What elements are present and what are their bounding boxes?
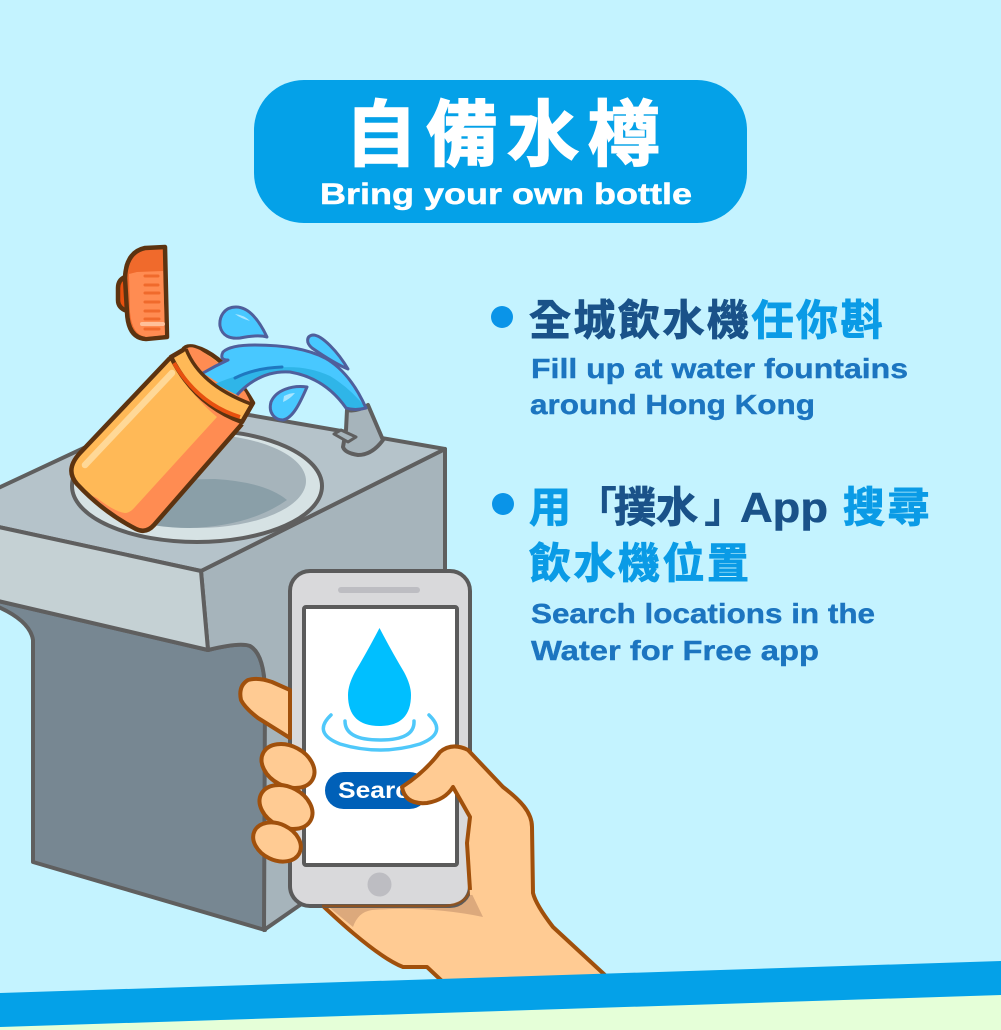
faucet [334,405,383,455]
palm lower outline [322,905,443,982]
index finger [240,679,290,738]
home button [368,872,392,896]
description 1: around Hong Kong [530,389,815,420]
fountain front face [0,526,208,650]
heading 2: 搜尋 [843,484,932,531]
icon: hand palm [322,750,610,982]
bottle highlight [85,373,172,465]
icon: fingers [240,679,322,869]
bottle opening [186,347,251,404]
basin rim [72,430,322,542]
bottle neck band [174,363,240,417]
heading 1: 全城飲水機 [529,297,752,344]
icon: orange bottle with water [71,345,366,531]
fountain top surface [0,403,445,571]
finger 2 [254,735,322,797]
description 1 [530,353,908,420]
fountain pedestal [0,600,265,930]
palm shadow [330,890,483,927]
description 1: Fill up at water fountains [531,353,908,384]
water drop logo [348,628,411,726]
description 2: Water for Free app [531,635,819,666]
basin water shade [88,479,287,528]
icon: thumb [402,745,606,976]
heading 2: 「 [575,484,617,531]
phone bottom shadow line [322,888,470,906]
heading 2: App [740,484,828,531]
title banner: 自備水樽 [345,96,669,176]
phone speaker [338,587,420,593]
bullet point 1 [491,297,908,420]
search button: Search [338,777,426,803]
finger 3 [252,776,320,838]
phone body [290,571,470,906]
bottle neck [171,346,253,422]
icon: water droplets [220,307,348,420]
illustration: water fountain [0,403,445,930]
title banner: Bring your own bottle [320,178,692,211]
heading 2: 撲水 [614,484,698,531]
basin interior [88,434,306,528]
heading 2: 飲水機位置 [529,540,752,587]
phone screen [304,607,457,865]
bottle light side [71,358,217,513]
title banner [254,80,747,223]
finger 4 [247,815,307,869]
bottle lip [186,349,251,404]
description 2 [531,598,875,666]
search button [325,772,428,809]
icon: smartphone app [290,571,470,906]
ripples [323,715,437,750]
water arc [203,345,366,410]
bottle body [71,358,242,531]
description 2: Search locations in the [531,598,875,629]
heading 2: 用 [529,484,571,531]
heading 1: 任你斟 [752,297,885,344]
icon: bottle cap [118,247,167,339]
ground band [0,961,1001,1030]
bottle outline [71,358,242,531]
heading 2 [529,484,932,587]
heading 2: 」 [704,484,746,531]
fountain right face [201,449,445,930]
bullet point 2 [492,484,932,666]
